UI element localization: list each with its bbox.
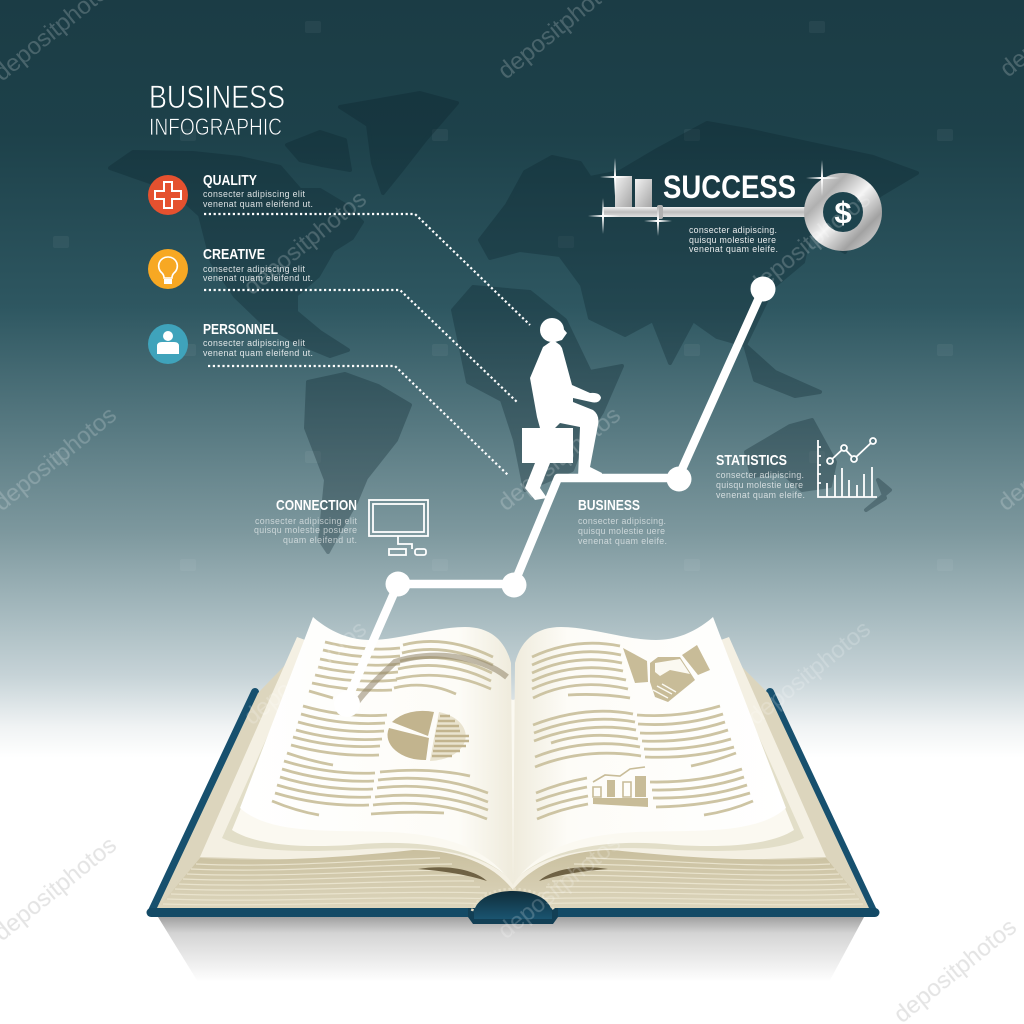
map: australia [746, 420, 835, 490]
success text: venenat quam eleife. [689, 244, 778, 254]
staircase path [334, 276, 776, 717]
title: BUSINESS [149, 79, 285, 115]
success heading: SUCCESS [663, 169, 796, 205]
arrow shadow on page [357, 656, 507, 702]
book shadow [158, 917, 864, 982]
sparkles [588, 158, 840, 236]
watermarks: depositphotos [239, 186, 372, 301]
business block [578, 497, 667, 546]
key bow with dollar: $ [834, 195, 852, 230]
icon: light bulb [148, 249, 188, 289]
pie chart [388, 711, 469, 761]
business block: BUSINESS [578, 497, 640, 514]
spine [468, 908, 558, 924]
dotted connector lines [204, 214, 530, 475]
watermarks: depositphotos [493, 830, 626, 945]
statistics text [716, 452, 805, 500]
open book [151, 617, 875, 924]
quality text [203, 172, 313, 209]
map: southeast asia islands [745, 345, 820, 396]
success key [588, 158, 882, 254]
map: eurasia [480, 123, 917, 363]
key bow with dollar [804, 173, 882, 251]
item: creative [148, 246, 313, 289]
connection text: quam eleifend ut. [283, 535, 357, 545]
icon: person [148, 324, 188, 364]
spine stitching [472, 889, 554, 911]
connection block [254, 497, 428, 555]
left page block [158, 617, 513, 908]
watermarks: depositphotos [493, 402, 626, 517]
success text: consecter adipiscing. [689, 225, 777, 235]
statistics block [716, 438, 877, 500]
creative text [203, 246, 313, 283]
connection text: CONNECTION [276, 497, 357, 514]
map: arctic islands [287, 132, 350, 170]
key teeth bars [615, 176, 652, 207]
map: africa [453, 287, 622, 490]
icon: handshake [623, 645, 710, 702]
quality text: QUALITY [203, 172, 257, 189]
quality text: venenat quam eleifend ut. [203, 199, 313, 209]
watermarks: depositphotos [743, 186, 876, 301]
personnel text: venenat quam eleifend ut. [203, 348, 313, 358]
icon: bar chart on page [593, 767, 648, 807]
right page block [513, 617, 868, 908]
spine arch [474, 891, 552, 919]
left page text lines [272, 641, 493, 819]
creative text: consecter adipiscing elit [203, 264, 306, 274]
business block: quisqu molestie uere [578, 526, 665, 536]
icon: monitor [369, 500, 428, 555]
map: north america [110, 152, 362, 356]
watermarks: depositphotos [743, 616, 876, 731]
personnel text: PERSONNEL [203, 321, 278, 338]
map: greenland [340, 93, 457, 193]
title [149, 79, 285, 141]
businessman silhouette [522, 318, 602, 500]
icon: red cross [148, 175, 188, 215]
business block: venenat quam eleife. [578, 536, 667, 546]
cover inner boards [157, 660, 869, 908]
statistics text: STATISTICS [716, 452, 787, 469]
quality text: consecter adipiscing elit [203, 189, 306, 199]
world map [110, 93, 917, 552]
success text [689, 225, 778, 254]
key shaft [603, 207, 808, 217]
connection text: quisqu molestie posuere [254, 525, 357, 535]
creative text: CREATIVE [203, 246, 265, 263]
book cover [151, 692, 875, 912]
item: quality [148, 172, 313, 215]
icon: statistics chart [818, 438, 877, 497]
camera watermark marks [53, 21, 953, 571]
map: new zealand [866, 480, 890, 510]
map: south america [306, 374, 410, 552]
statistics text: consecter adipiscing. [716, 470, 804, 480]
statistics text: quisqu molestie uere [716, 480, 803, 490]
title: INFOGRAPHIC [149, 114, 282, 141]
item: personnel [148, 321, 313, 364]
right page text lines [532, 643, 753, 819]
personnel text: consecter adipiscing elit [203, 338, 306, 348]
connection text [254, 497, 358, 545]
watermarks on white [0, 832, 1022, 1024]
connection text: consecter adipiscing elit [255, 516, 358, 526]
personnel text [203, 321, 313, 358]
business block: consecter adipiscing. [578, 516, 666, 526]
creative text: venenat quam eleifend ut. [203, 273, 313, 283]
success text: quisqu molestie uere [689, 235, 776, 245]
watermarks: depositphotos [239, 616, 372, 731]
statistics text: venenat quam eleife. [716, 490, 805, 500]
